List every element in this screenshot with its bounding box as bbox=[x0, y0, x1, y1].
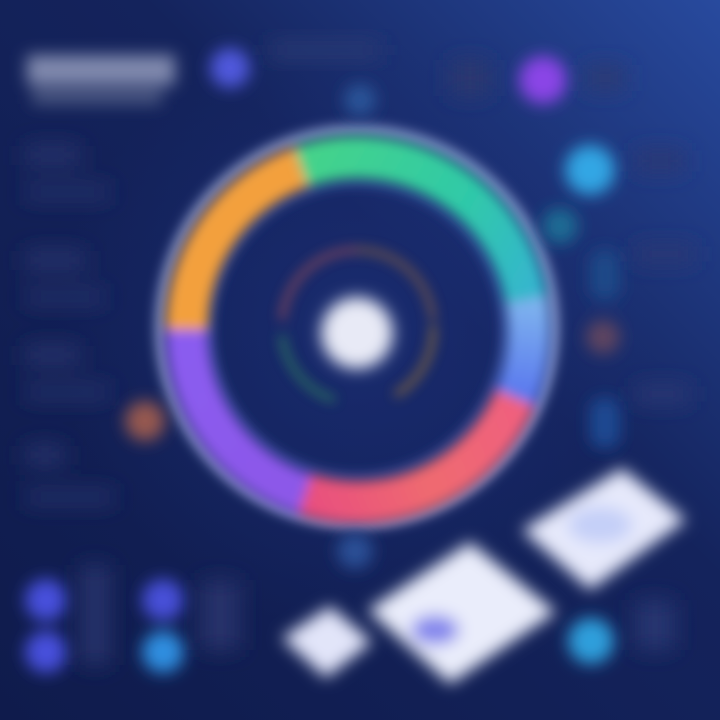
right cyan dot bbox=[565, 145, 615, 195]
right column indicators bbox=[586, 250, 620, 448]
bottom right text block bbox=[635, 600, 675, 650]
top connector dot bbox=[344, 84, 376, 116]
right column text blocks bbox=[635, 150, 695, 403]
left orange dot bbox=[125, 401, 165, 441]
bottom connector dot bbox=[337, 533, 373, 569]
header legend: indigo item bbox=[210, 42, 380, 88]
tile: large right bbox=[522, 468, 686, 590]
inner dim ring bbox=[282, 250, 433, 400]
center circle bbox=[321, 297, 393, 369]
left column text blocks bbox=[25, 145, 115, 504]
bottom left text blocks bbox=[80, 565, 240, 665]
tile: small left bbox=[282, 606, 372, 678]
ring halo bbox=[160, 130, 554, 524]
bottom right cyan dot bbox=[568, 618, 614, 664]
ring segments bbox=[187, 157, 529, 502]
segment: orange bbox=[187, 167, 301, 330]
segment: green bbox=[301, 157, 526, 300]
segment: purple bbox=[187, 330, 305, 494]
segment: blue bbox=[515, 300, 529, 398]
header legend: purple item bbox=[450, 56, 625, 104]
bottom left icon dots bbox=[25, 579, 184, 673]
title block bbox=[27, 55, 175, 104]
ring chart bbox=[160, 130, 554, 524]
segment: red bbox=[305, 398, 515, 502]
right teal dot bbox=[542, 208, 578, 244]
tile: center bbox=[368, 542, 556, 684]
